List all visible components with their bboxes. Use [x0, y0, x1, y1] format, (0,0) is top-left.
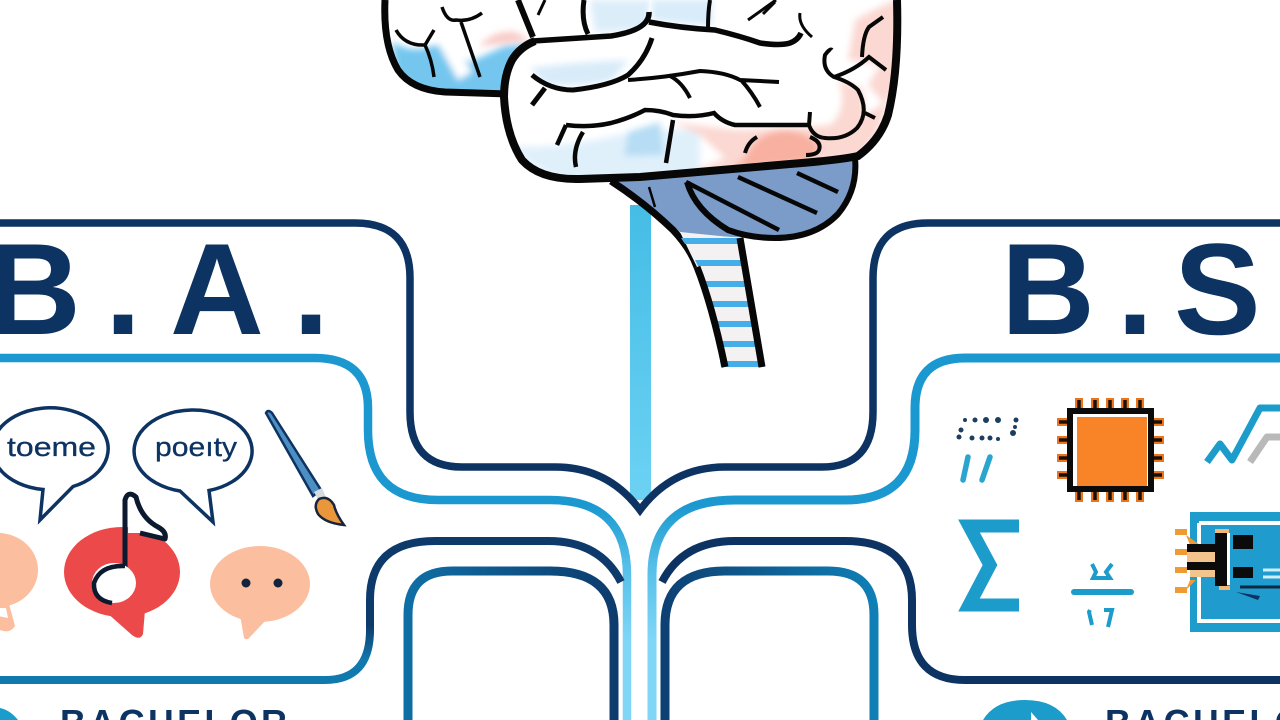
peach speech bubble with dots	[210, 546, 310, 639]
icon: sigma	[969, 526, 1019, 605]
left inner arc	[408, 571, 614, 720]
central blue stem bar	[630, 205, 651, 500]
main brain lobe	[504, 0, 900, 180]
badge circle: right	[983, 700, 1067, 720]
brain illustration	[385, 0, 900, 367]
cerebellum	[611, 155, 856, 267]
connector: left inner blue branch	[0, 358, 627, 720]
speech bubble: poetry	[134, 410, 252, 522]
icon: blue glyphs	[963, 457, 990, 480]
icon: paint brush	[266, 411, 344, 525]
brain stem	[680, 232, 765, 367]
speech bubble: poetry: poeıty	[155, 432, 238, 462]
speech bubble: toeme	[0, 408, 108, 520]
connector: outer navy branch	[0, 223, 1280, 510]
icon: orange microchip	[1057, 398, 1164, 502]
icon: circuit board	[1175, 512, 1280, 632]
right inner arc	[665, 571, 874, 720]
right lower navy arc and panel base	[662, 541, 1280, 680]
speech bubble: toeme: toeme	[7, 432, 96, 462]
left lower navy arc and panel base	[0, 541, 621, 680]
badge circle: left	[0, 708, 18, 720]
connector: right inner blue branch	[652, 358, 1280, 720]
upper brain lobes	[385, 0, 650, 98]
red speech bubble with music note	[64, 494, 180, 638]
heading: B.S: B.S	[1001, 216, 1261, 362]
icon: dotted bracket	[956, 417, 1018, 441]
right icon group: STEM symbols	[956, 398, 1280, 632]
icon: line chart	[1207, 408, 1280, 462]
left icon group: speech bubbles, music, brush	[0, 408, 344, 639]
peach speech bubble: left	[0, 533, 38, 631]
icon: fraction	[1074, 564, 1131, 627]
